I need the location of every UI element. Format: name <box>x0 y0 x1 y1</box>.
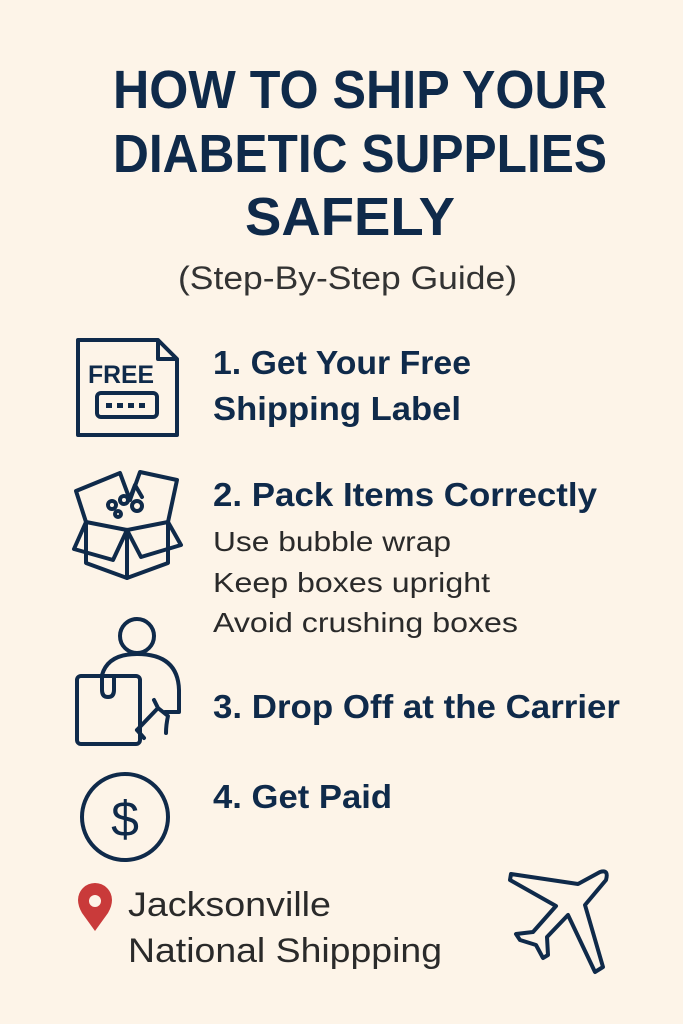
icon: location pin <box>78 883 112 931</box>
icon: free label <box>78 340 177 435</box>
title: DIABETIC SUPPLIES <box>113 124 607 184</box>
step 3: 3. Drop Off at the Carrier <box>213 688 620 725</box>
icon: person with box <box>77 619 179 744</box>
step 2: 2. Pack Items Correctly <box>213 476 598 513</box>
step 1 heading: 1. Get Your Free <box>213 344 471 381</box>
icon: open box <box>74 472 181 578</box>
step 4: 4. Get Paid <box>213 778 392 815</box>
footer text <box>128 886 442 970</box>
icon: free label: FREE <box>88 361 154 389</box>
footer text: National Shippping <box>128 932 442 970</box>
icon: dollar coin: $ <box>111 791 139 847</box>
subtitle: (Step-By-Step Guide) <box>178 260 517 296</box>
title <box>113 60 607 247</box>
icon: airplane <box>510 871 607 972</box>
title: HOW TO SHIP YOUR <box>113 60 607 120</box>
icon: dollar coin <box>82 774 168 860</box>
step 2: Keep boxes upright <box>213 567 490 598</box>
step 2: Avoid crushing boxes <box>213 607 518 638</box>
step 1 heading <box>213 344 471 427</box>
title: SAFELY <box>245 187 455 247</box>
footer text: Jacksonville <box>128 886 331 924</box>
step 2 <box>213 476 598 638</box>
step 1 heading: Shipping Label <box>213 390 461 427</box>
step 2: Use bubble wrap <box>213 526 451 557</box>
